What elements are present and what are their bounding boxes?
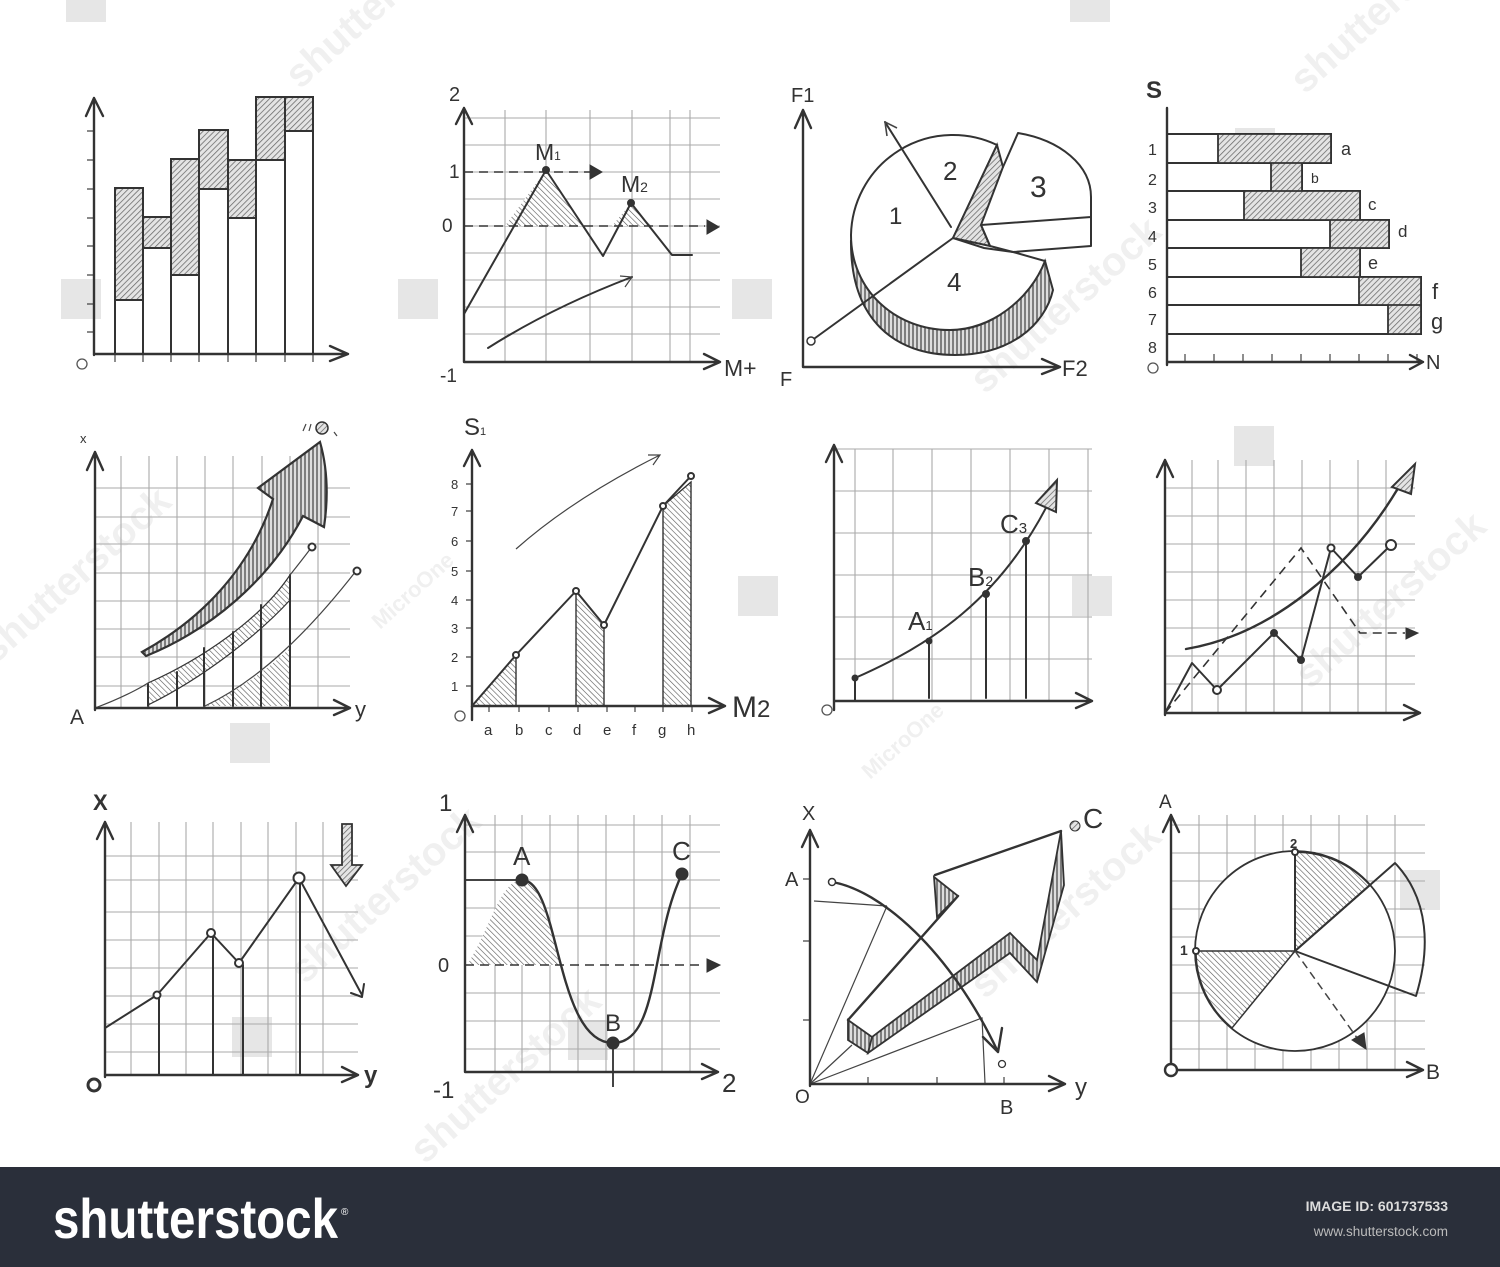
chart: 3D pie: F	[780, 369, 792, 391]
chart: line with hatched columns: f	[632, 722, 637, 739]
chart: line with peaks M1 M2: -1	[440, 366, 457, 387]
chart: 3D pie: F2	[1062, 356, 1088, 381]
chart: horizontal gantt bars: 4	[1148, 229, 1157, 246]
chart: rising arrow and bands: x	[80, 431, 87, 446]
chart: line with hatched columns: 3	[451, 621, 458, 636]
chart: line with hatched columns: M2	[732, 691, 770, 724]
chart: rising arrow and bands: y	[355, 697, 366, 722]
watermarks: shutterstock	[962, 813, 1170, 1007]
chart: horizontal gantt bars: c	[1368, 195, 1377, 214]
footer bar: IMAGE ID: 601737533	[1306, 1198, 1448, 1214]
chart: line with peaks M1 M2: M1	[535, 139, 561, 165]
chart: horizontal gantt bars	[1146, 77, 1443, 374]
chart: line with peaks M1 M2: 0	[442, 216, 453, 237]
chart: line with peaks M1 M2: M2	[621, 171, 648, 197]
chart: big 3D arrow with arc: A	[785, 869, 799, 891]
chart: circle sectors: B	[1426, 1061, 1440, 1084]
chart: line with hatched columns: 6	[451, 534, 458, 549]
chart: line with hatched columns: 5	[451, 564, 458, 579]
chart: circle sectors: 2	[1290, 836, 1297, 851]
chart: 3D pie: 1	[889, 203, 902, 230]
chart: big 3D arrow with arc: C	[1083, 803, 1103, 834]
chart: line with hatched columns: a	[484, 722, 493, 739]
chart: big 3D arrow with arc: O	[795, 1087, 810, 1108]
chart: line with hatched columns: h	[687, 722, 695, 739]
chart: wave with A B C: C	[672, 836, 691, 866]
chart: horizontal gantt bars: 7	[1148, 312, 1157, 329]
chart: wave with A B C: B	[605, 1010, 621, 1037]
chart: line with drop lines and down arrow: X	[93, 790, 108, 815]
watermarks: MicroOne	[857, 697, 949, 784]
footer bar	[0, 1167, 1500, 1267]
chart: horizontal gantt bars: b	[1311, 170, 1319, 186]
chart: wave with A B C	[433, 790, 736, 1104]
chart: rising arrow and bands: A	[70, 706, 84, 729]
chart: horizontal gantt bars: d	[1398, 222, 1407, 241]
chart: line with drop lines and down arrow	[88, 790, 378, 1091]
chart: line with hatched columns: 7	[451, 504, 458, 519]
chart: line with peaks M1 M2: 2	[449, 84, 460, 106]
watermarks: shutterstock	[962, 208, 1170, 402]
chart: line with hatched columns: g	[658, 722, 666, 739]
chart: exponential curve A1 B2 C3: C3	[1000, 509, 1027, 539]
chart: 3D pie: F1	[791, 85, 814, 107]
chart: horizontal gantt bars: f	[1432, 279, 1439, 304]
chart: circle sectors: A	[1159, 792, 1172, 813]
chart: line with hatched columns: 4	[451, 593, 458, 608]
chart: exponential curve A1 B2 C3	[822, 445, 1092, 715]
chart: 3D pie	[780, 85, 1091, 391]
chart: 3D pie: 4	[947, 267, 961, 297]
chart: horizontal gantt bars: S	[1146, 77, 1162, 104]
chart: exponential curve A1 B2 C3: A1	[908, 606, 933, 636]
chart: line with peaks M1 M2: M+	[724, 355, 757, 381]
chart: horizontal gantt bars: g	[1431, 309, 1443, 334]
chart: 3D pie: 2	[943, 156, 957, 186]
chart: wave with A B C: 0	[438, 955, 449, 977]
chart: circle sectors	[1159, 792, 1440, 1084]
chart: horizontal gantt bars: a	[1341, 139, 1352, 159]
chart: 3D pie: 3	[1030, 171, 1047, 204]
chart: horizontal gantt bars: 1	[1148, 142, 1157, 159]
chart: line with hatched columns: 2	[451, 650, 458, 665]
footer bar: ®	[341, 1207, 349, 1218]
chart: wave with A B C: 2	[722, 1068, 736, 1098]
chart: horizontal gantt bars: N	[1426, 352, 1440, 374]
chart: big 3D arrow with arc	[785, 803, 1103, 1119]
chart: exponential curve A1 B2 C3: B2	[968, 562, 993, 592]
chart: wave with A B C: -1	[433, 1077, 454, 1104]
chart: rising arrow and bands	[70, 422, 366, 729]
chart: zigzag with curve arrow	[1157, 460, 1420, 720]
chart: line with hatched columns: 1	[451, 679, 458, 694]
footer logo: shutterstock	[53, 1187, 339, 1250]
watermarks: shutterstock	[402, 978, 610, 1172]
chart: big 3D arrow with arc: B	[1000, 1097, 1013, 1119]
chart: circle sectors: 1	[1180, 942, 1188, 958]
chart: horizontal gantt bars: 6	[1148, 285, 1157, 302]
chart: horizontal gantt bars: 2	[1148, 172, 1157, 189]
chart: horizontal gantt bars: e	[1368, 253, 1378, 273]
watermarks: MicroOne	[367, 547, 459, 634]
chart: line with peaks M1 M2: 1	[449, 162, 460, 183]
chart: wave with A B C: 1	[439, 790, 452, 817]
chart: line with hatched columns	[451, 414, 770, 739]
watermarks: shutterstock	[1287, 503, 1495, 697]
chart: line with peaks M1 M2	[440, 84, 757, 387]
chart: horizontal gantt bars: 3	[1148, 200, 1157, 217]
chart: stacked bars	[77, 97, 348, 369]
chart: horizontal gantt bars: 5	[1148, 257, 1157, 274]
chart: line with hatched columns: d	[573, 722, 581, 739]
chart: horizontal gantt bars: 8	[1148, 340, 1157, 357]
chart: line with drop lines and down arrow: y	[364, 1062, 378, 1089]
chart: big 3D arrow with arc: y	[1075, 1074, 1087, 1101]
chart: line with hatched columns: e	[603, 722, 611, 739]
chart: line with hatched columns: b	[515, 722, 523, 739]
watermarks: shutterstock	[282, 798, 490, 992]
chart: wave with A B C: A	[513, 841, 531, 871]
footer bar: www.shutterstock.com	[1313, 1224, 1448, 1239]
chart: line with hatched columns: S1	[464, 414, 486, 441]
chart: big 3D arrow with arc: X	[802, 803, 815, 825]
chart: line with hatched columns: c	[545, 722, 553, 739]
chart: line with hatched columns: 8	[451, 477, 458, 492]
